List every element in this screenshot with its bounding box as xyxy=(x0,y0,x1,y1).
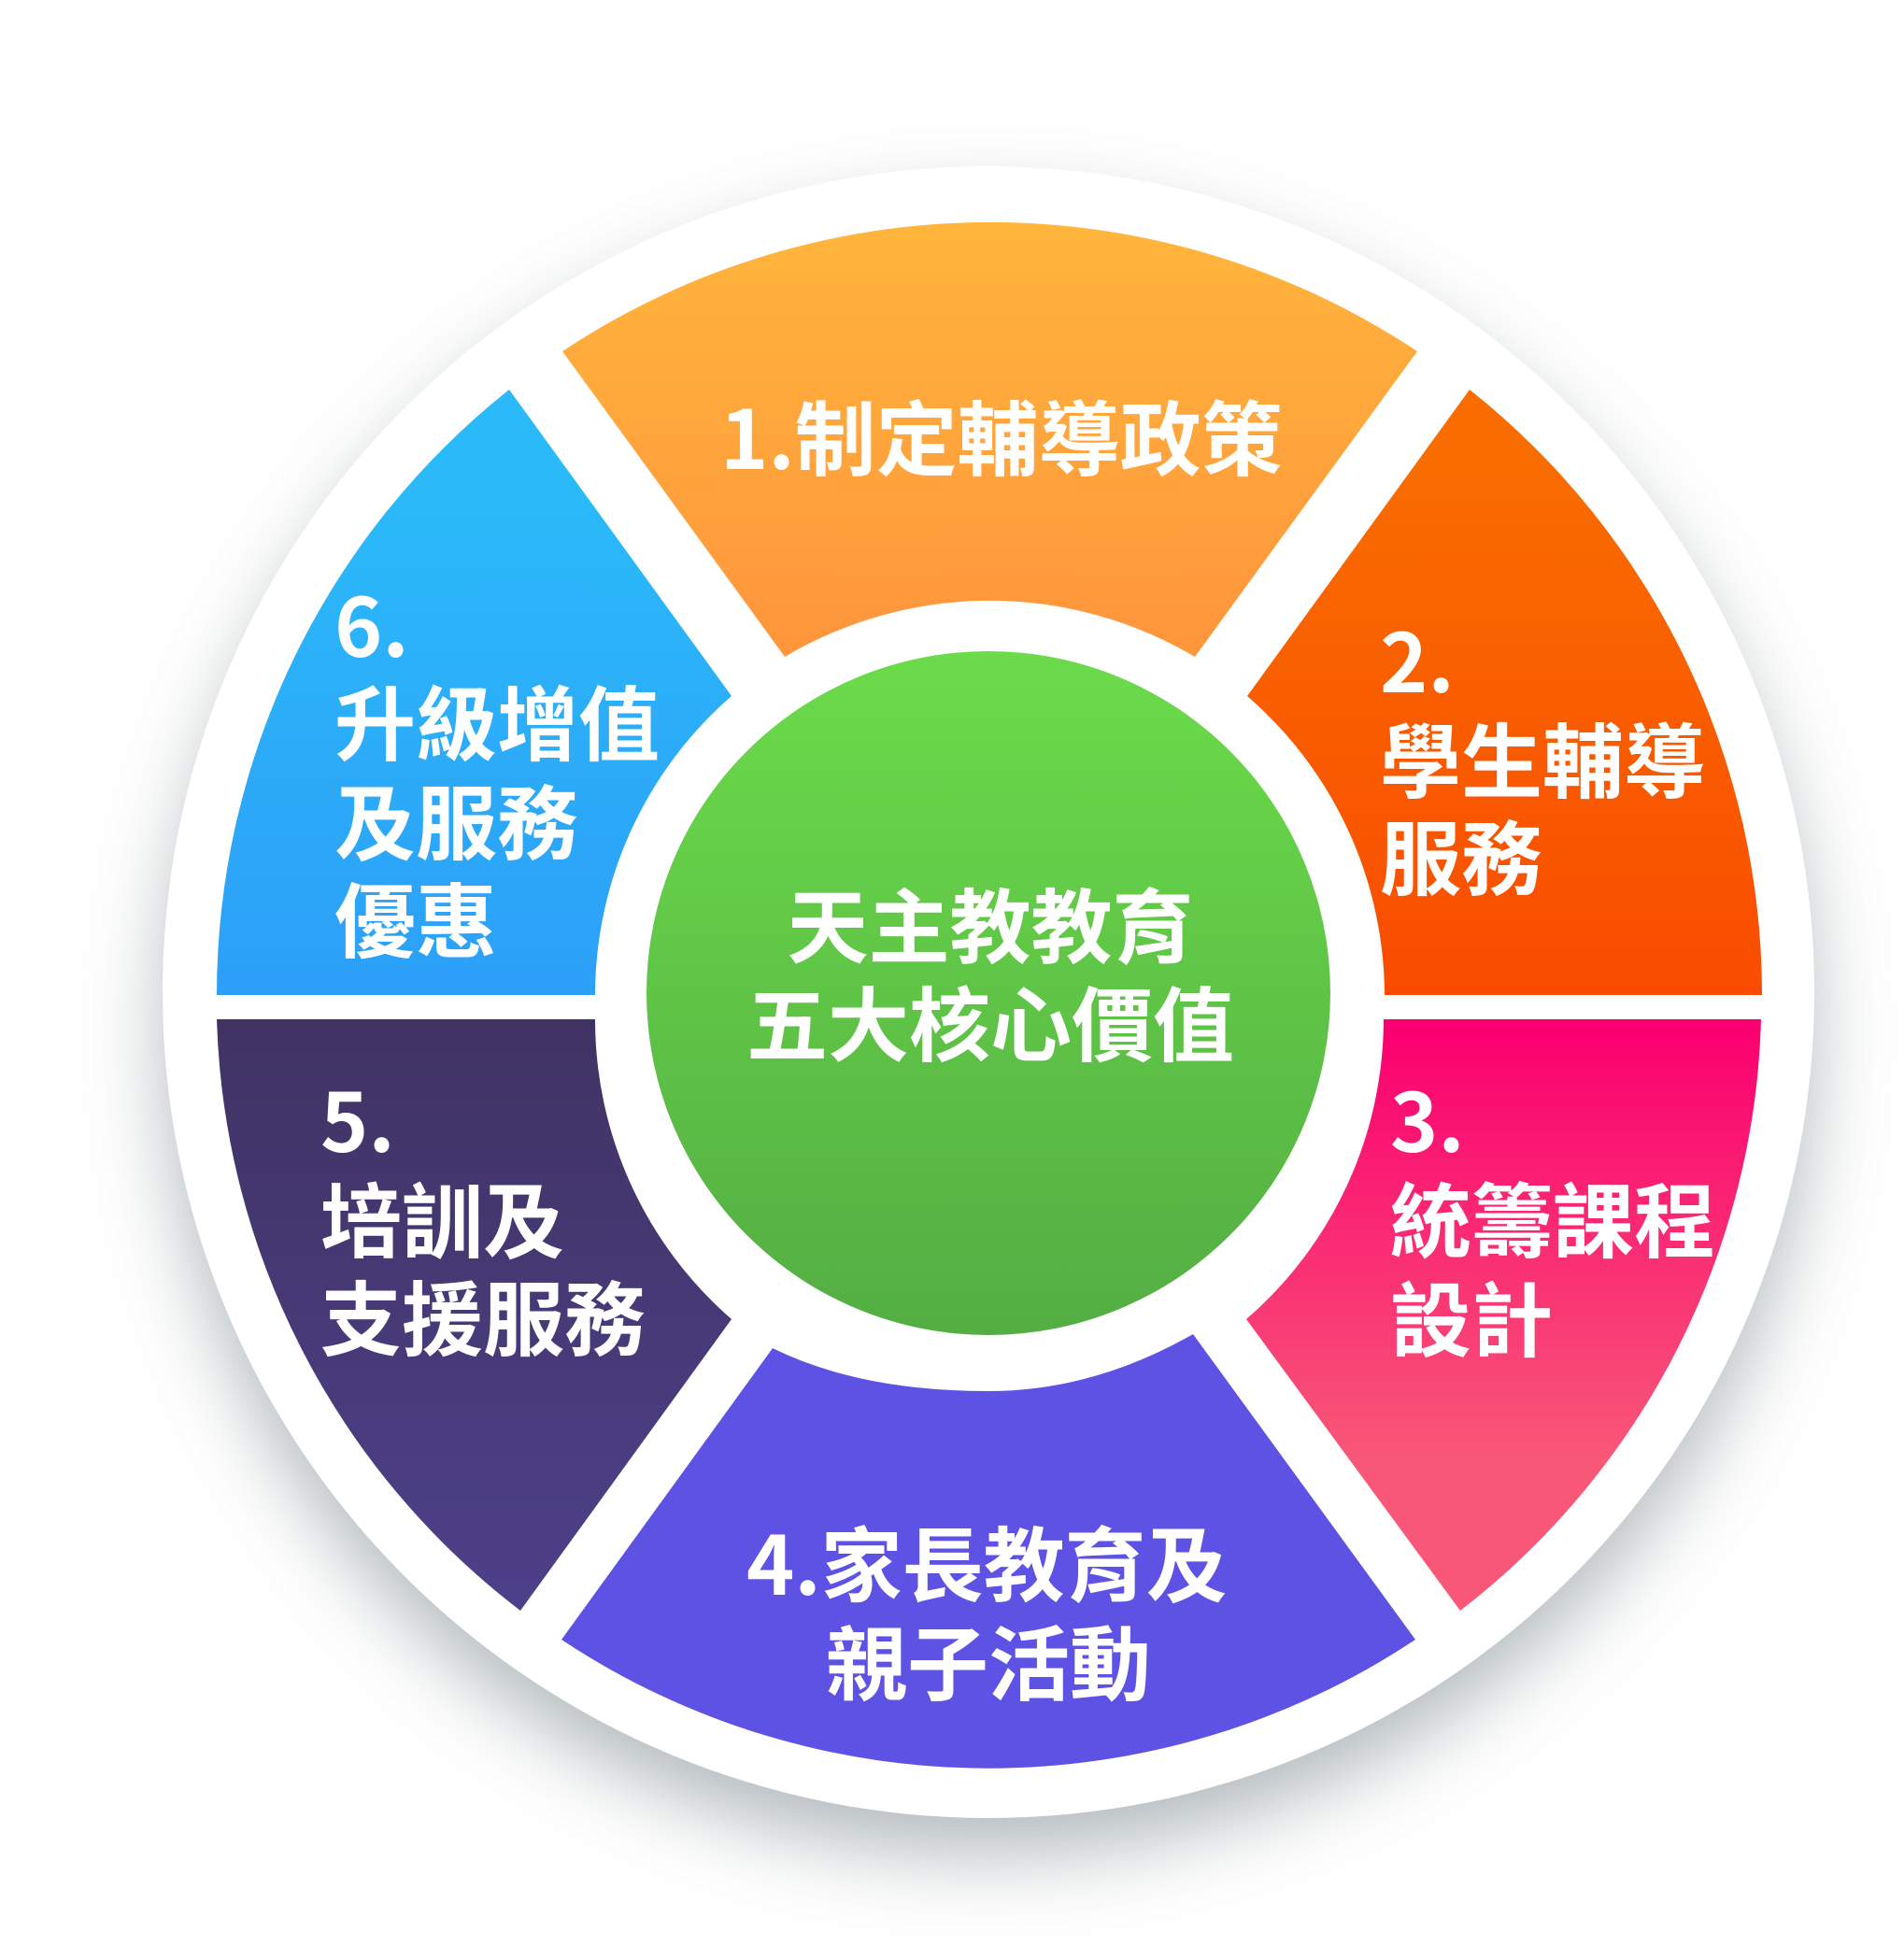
drop shadow of wheel xyxy=(166,209,1811,1854)
label: segment 5: 支援服務 xyxy=(320,1256,646,1373)
panel: segment 6 xyxy=(217,390,732,995)
label: segment 2: 服務 xyxy=(1380,795,1542,913)
panel: segment 1 xyxy=(562,222,1417,657)
panel: segment 3 xyxy=(1246,1019,1761,1611)
label: segment 3: 設計 xyxy=(1390,1257,1553,1374)
label: segment 1: 1.制定輔導政策 xyxy=(720,376,1283,493)
center circle xyxy=(647,651,1330,1335)
center title: 五大核心價值 xyxy=(746,961,1234,1079)
center title: 天主教教育 xyxy=(787,863,1194,981)
panel: segment 2 xyxy=(1247,390,1762,995)
wheel base disc xyxy=(163,166,1814,1818)
panel: segment 4 xyxy=(561,1334,1415,1769)
label: segment 6: 及服務 xyxy=(334,760,578,877)
label: segment 5: 培訓及 xyxy=(320,1158,564,1275)
label: segment 3: 3. xyxy=(1390,1059,1465,1176)
label: segment 6: 6. xyxy=(334,563,409,681)
label: segment 5: 5. xyxy=(320,1059,395,1176)
label: segment 6: 優惠 xyxy=(334,858,497,975)
label: segment 3: 統籌課程 xyxy=(1390,1158,1715,1275)
label: segment 2: 學生輔導 xyxy=(1380,698,1705,816)
label: segment 4: 4.家長教育及 xyxy=(746,1501,1228,1619)
label: segment 6: 升級增值 xyxy=(334,661,660,778)
panel: segment 5 xyxy=(217,1019,732,1611)
label: segment 4: 親子活動 xyxy=(826,1600,1151,1718)
label: segment 2: 2. xyxy=(1380,599,1455,717)
